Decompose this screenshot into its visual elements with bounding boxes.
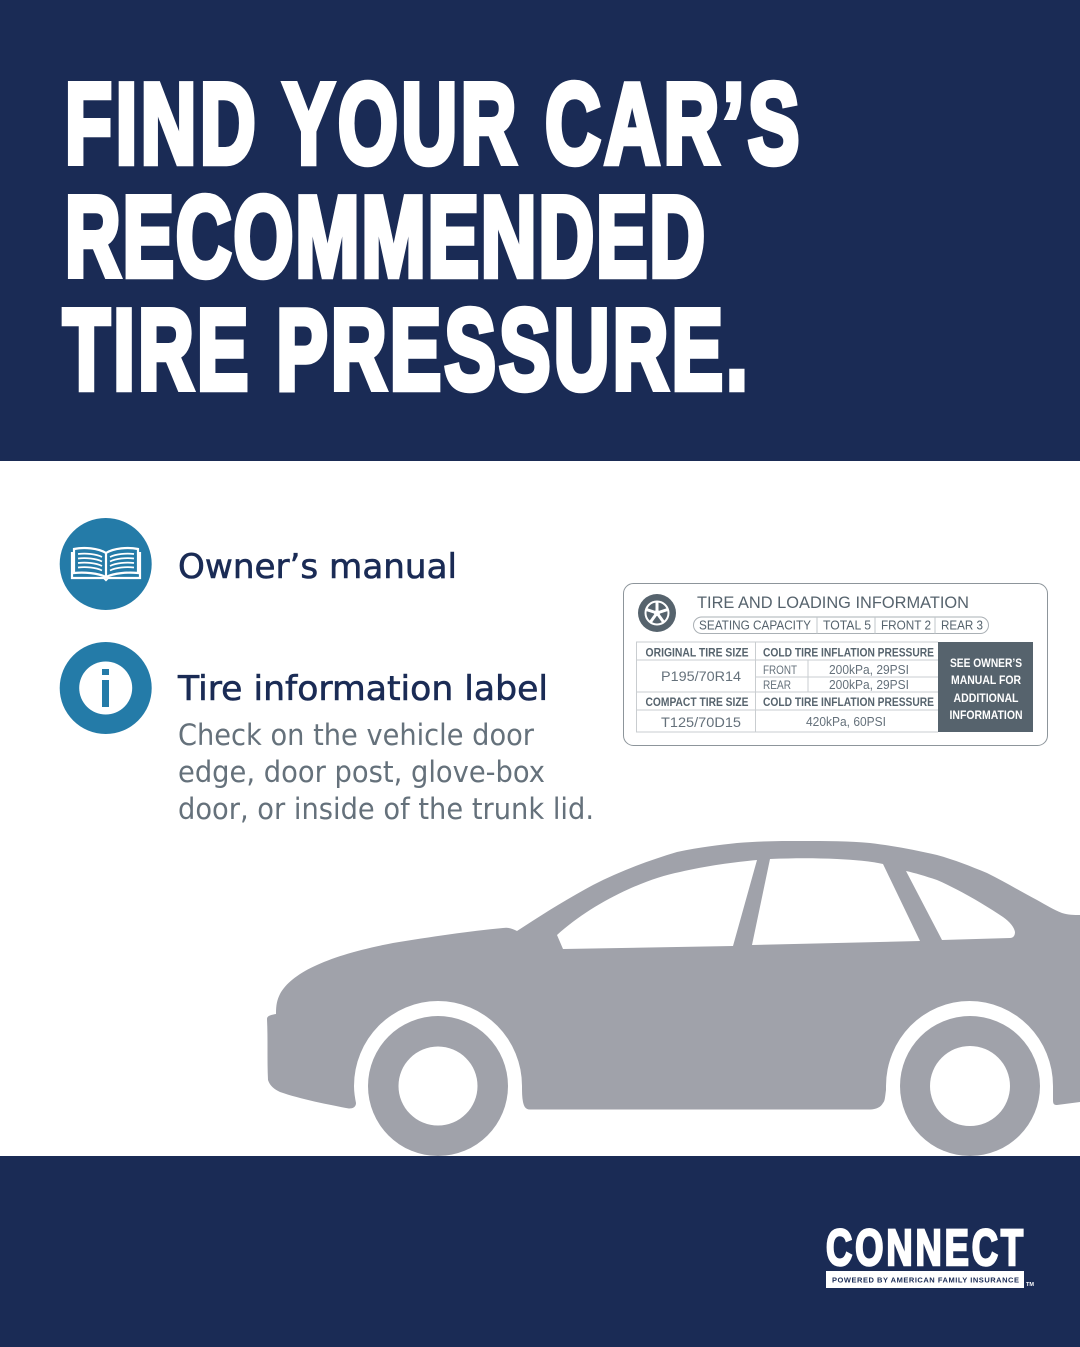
icon: tire — [638, 594, 676, 632]
tire size table: 420kPa, 60PSI — [806, 715, 886, 729]
panel: tire and loading information label — [624, 584, 1048, 746]
logo: connect — [826, 1219, 1034, 1288]
logo: connect: POWERED BY AMERICAN FAMILY INSURANCE — [832, 1276, 1019, 1284]
title: TIRE PRESSURE. — [63, 287, 751, 414]
tire size table: COLD TIRE INFLATION PRESSURE — [763, 695, 934, 709]
window: front — [906, 871, 1015, 940]
icon: information — [60, 642, 152, 734]
tire size table: FRONT — [763, 663, 798, 677]
icon: open book — [60, 518, 152, 610]
text block: where to check: Check on the vehicle door — [178, 718, 535, 752]
text block: where to check: edge, door post, glove-box — [178, 755, 545, 789]
window: middle — [752, 858, 920, 945]
callout: see owner's manual: ADDITIONAL — [954, 691, 1018, 705]
tire size table: 200kPa, 29PSI — [829, 678, 909, 692]
seating capacity pill: REAR 3 — [941, 618, 983, 632]
footer band with logo — [0, 1156, 1080, 1347]
tire size table: T125/70D15 — [661, 714, 741, 730]
text block: where to check: door, or inside of the trunk lid. — [178, 792, 594, 826]
header band with title — [0, 0, 1080, 461]
tire size table: COMPACT TIRE SIZE — [646, 695, 748, 709]
callout: see owner's manual — [938, 642, 1033, 732]
text block: where to check — [178, 718, 594, 826]
tire size table: COLD TIRE INFLATION PRESSURE — [763, 646, 934, 660]
tire size table: ORIGINAL TIRE SIZE — [646, 646, 748, 660]
tire size table: 200kPa, 29PSI — [829, 663, 909, 677]
label heading: TIRE AND LOADING INFORMATION — [697, 593, 969, 612]
callout: see owner's manual: SEE OWNER’S — [950, 656, 1022, 670]
window: rear — [557, 860, 757, 949]
heading: owner's manual: Owner’s manual — [178, 547, 457, 587]
seating capacity pill: FRONT 2 — [881, 618, 931, 632]
callout: see owner's manual: MANUAL FOR — [951, 673, 1021, 687]
title — [63, 61, 803, 414]
wheel: right — [900, 1016, 1040, 1156]
car illustration — [267, 841, 1080, 1156]
title: RECOMMENDED — [65, 174, 707, 301]
logo: connect: TM — [1026, 1282, 1034, 1288]
wheel: left — [368, 1016, 508, 1156]
seating capacity pill: TOTAL 5 — [823, 618, 871, 632]
tire size table: REAR — [763, 678, 791, 692]
callout: see owner's manual: INFORMATION — [950, 708, 1022, 722]
tire size table — [636, 642, 938, 732]
heading: tire information label: Tire information label — [177, 669, 548, 709]
seating capacity pill: SEATING CAPACITY — [699, 618, 812, 632]
seating capacity pill — [694, 617, 988, 634]
tire size table: P195/70R14 — [661, 668, 741, 684]
